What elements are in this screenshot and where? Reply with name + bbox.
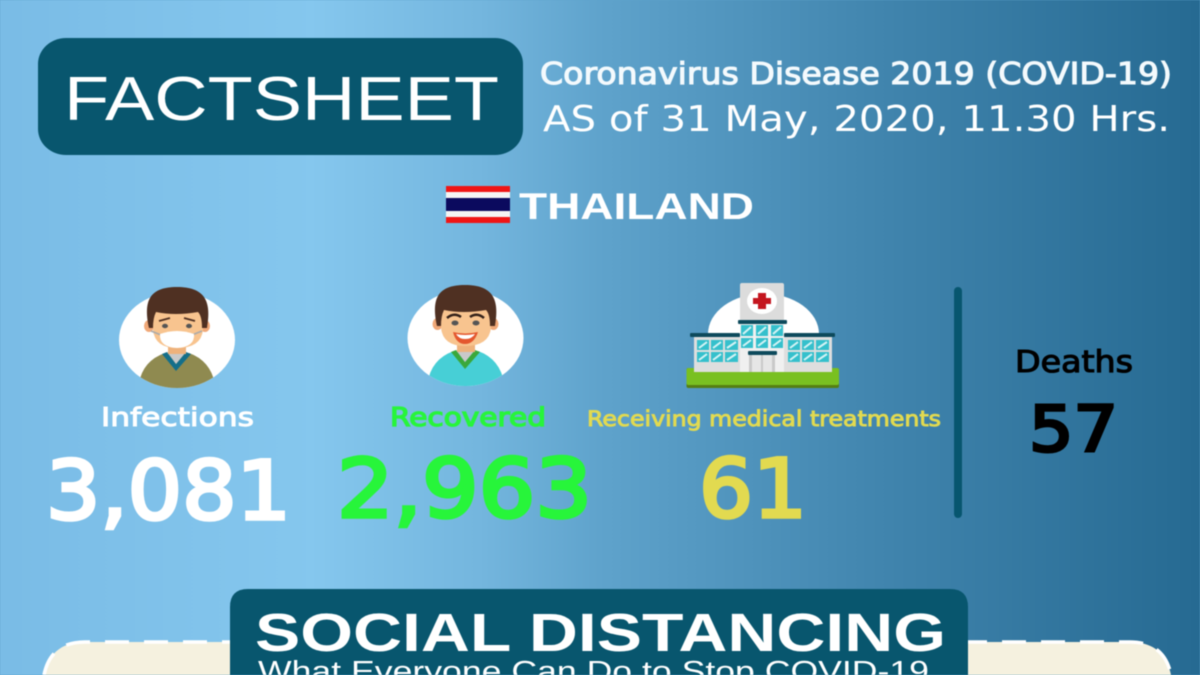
country label: Thailand with flag [446,186,754,227]
icon: hospital [686,283,839,388]
country label: Thailand with flag: THAILAND [519,186,754,227]
stat: infections [46,287,291,539]
stat: recovered [337,285,592,537]
stat: receiving medical treatments: 61 [699,443,807,537]
header badge: FACTSHEET [38,38,523,155]
stat: recovered: Recovered [390,403,546,433]
stat: deaths: 57 [1029,393,1118,466]
vertical divider [954,287,962,518]
icon: Thai flag [446,186,510,223]
stat: receiving medical treatments: Receiving medical treatments [587,407,941,431]
icon: smiling man avatar [408,285,524,390]
stat: receiving medical treatments [587,283,941,537]
stat: infections: 3,081 [46,445,291,539]
stat: infections: Infections [101,403,254,433]
header subtitle: disease and date: AS of 31 May, 2020, 11.30 Hrs. [543,99,1170,140]
header badge: FACTSHEET: FACTSHEET [64,65,499,134]
stat: recovered: 2,963 [337,443,592,537]
section heading: social distancing: SOCIAL DISTANCING [255,603,946,663]
icon: masked man avatar [119,287,235,392]
header subtitle: disease and date [540,57,1172,140]
stat: deaths [1015,345,1133,466]
header subtitle: disease and date: Coronavirus Disease 2019 (COVID-19) [540,57,1172,92]
stat: deaths: Deaths [1015,345,1133,380]
panel: cream content card [44,642,1171,675]
section heading: social distancing [230,589,968,675]
